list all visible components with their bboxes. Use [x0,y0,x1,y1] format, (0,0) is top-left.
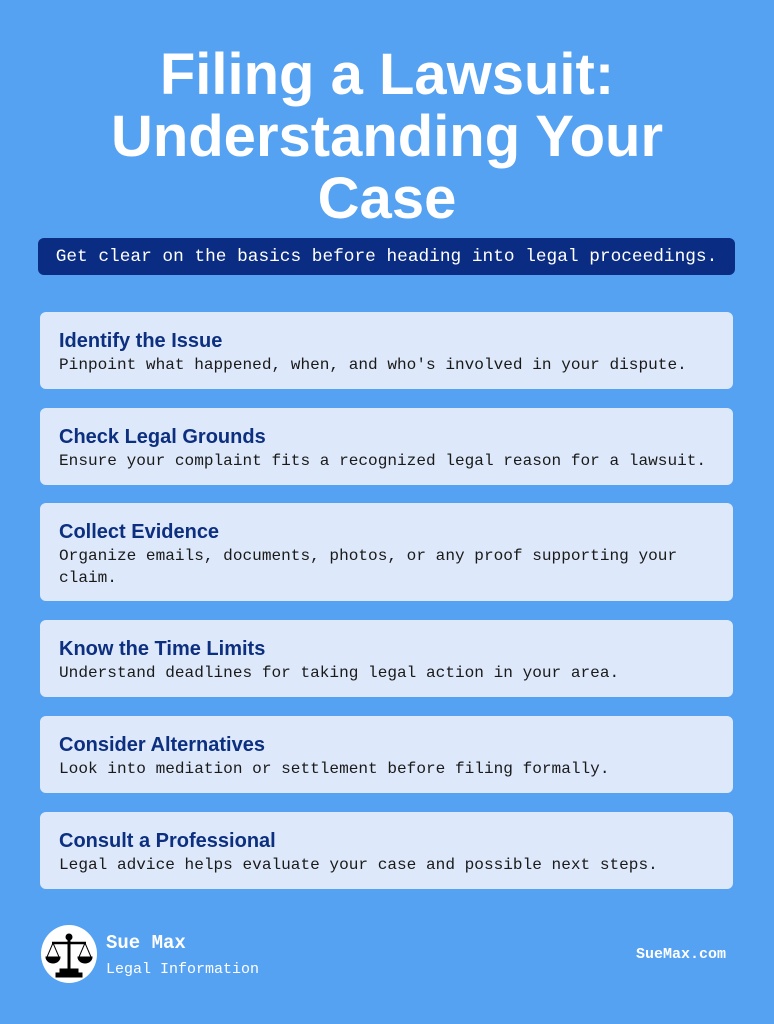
footer brand name: Sue Max [106,932,186,954]
card: identify the issue: Identify the Issue [59,330,222,352]
footer logo: scales [41,925,97,983]
card: identify the issue [40,312,733,389]
card: collect evidence [40,503,733,601]
card: consider alternatives: Consider Alternatives [59,734,265,756]
card: consult a professional: Consult a Professional [59,830,276,852]
card: collect evidence: Collect Evidence [59,521,219,543]
card: consult a professional [40,812,733,889]
card: check legal grounds [40,408,733,485]
title: Case [318,166,456,231]
title: Filing a Lawsuit: [160,42,614,107]
card: check legal grounds: Check Legal Grounds [59,426,266,448]
card: know the time limits [40,620,733,697]
card: consider alternatives: Look into mediation or settlement before filing formally. [59,760,610,778]
card: consider alternatives [40,716,733,793]
card: identify the issue: Pinpoint what happened, when, and who's involved in your dispute. [59,356,687,374]
card: know the time limits: Understand deadlines for taking legal action in your area. [59,664,619,682]
card: consult a professional: Legal advice helps evaluate your case and possible next steps. [59,856,658,874]
title: Understanding Your [111,104,663,169]
subtitle banner [38,238,735,275]
card: know the time limits: Know the Time Limits [59,638,265,660]
footer website: SueMax.com [636,946,726,963]
card: collect evidence: Organize emails, documents, photos, or any proof supporting your claim. [59,547,677,587]
title [111,42,663,231]
footer tagline: Legal Information [106,961,259,978]
subtitle banner: Get clear on the basics before heading into legal proceedings. [56,247,717,267]
card: check legal grounds: Ensure your complaint fits a recognized legal reason for a lawsuit. [59,452,706,470]
